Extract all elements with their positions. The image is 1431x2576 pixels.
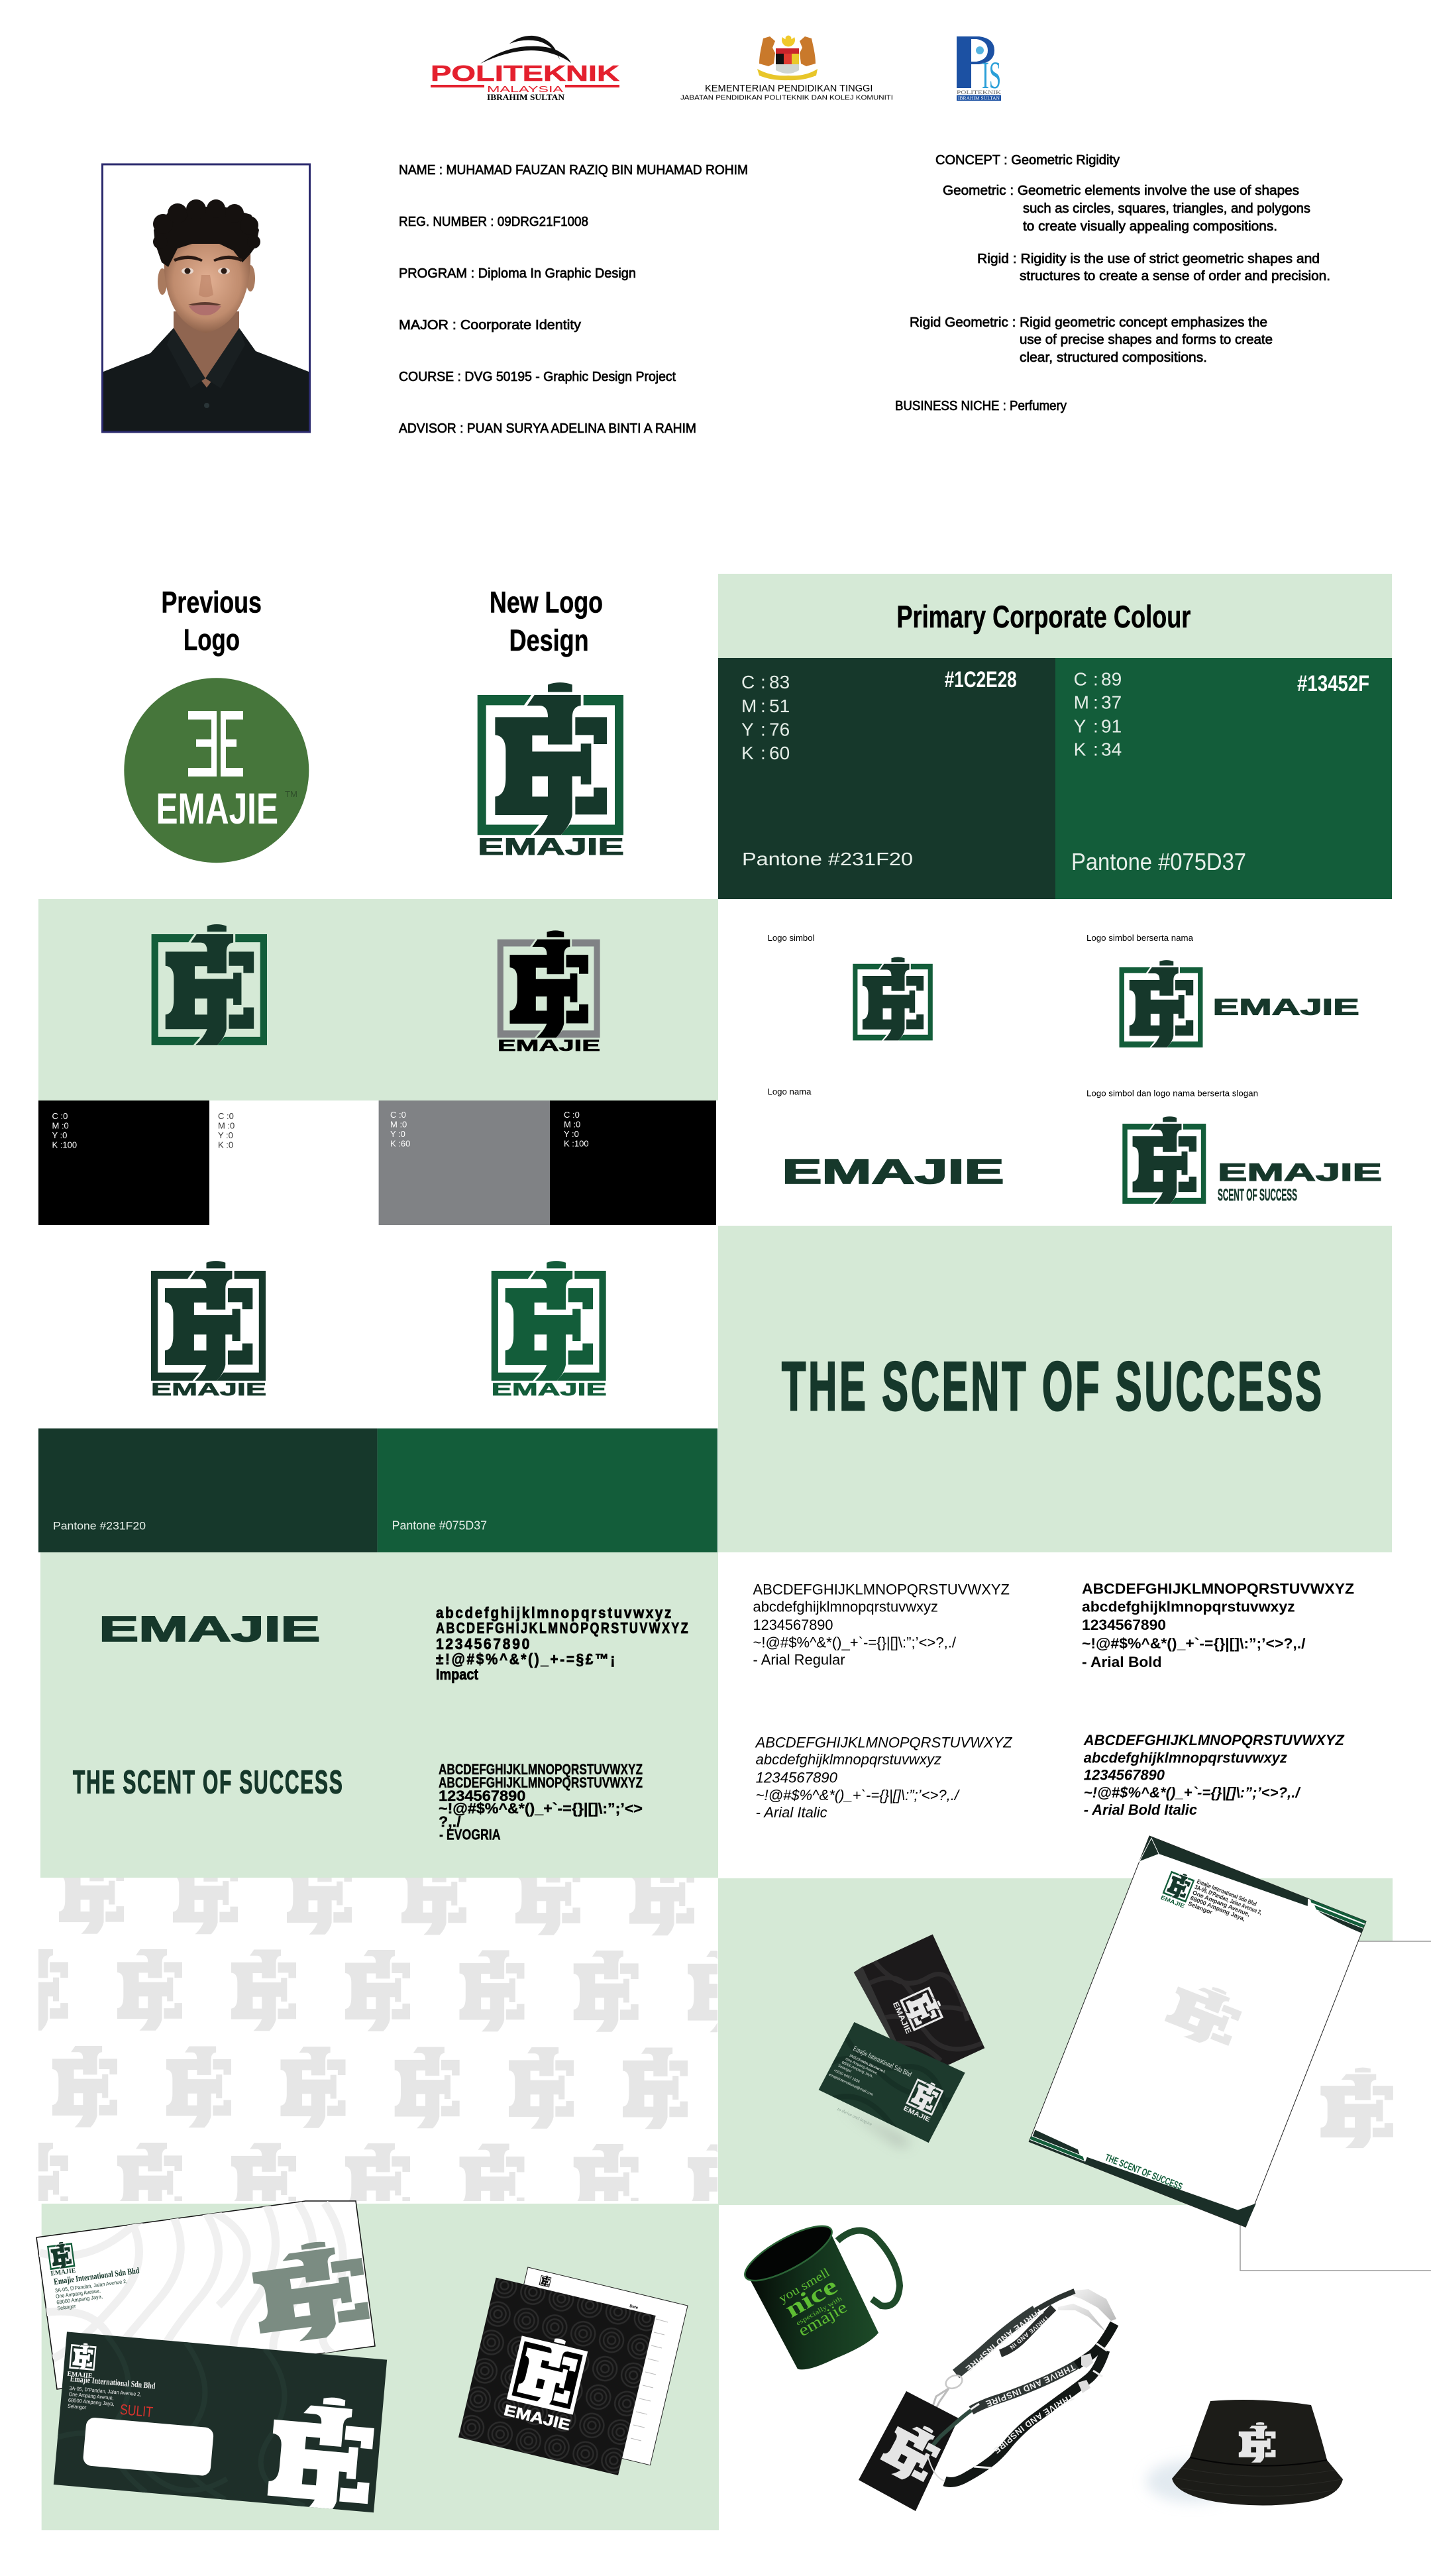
swatch: dark green: 83 [769, 672, 790, 692]
swatch: dark green: : [761, 720, 766, 740]
logo: dark green one-colour: EMAJIE [151, 1379, 266, 1399]
swatch: Pantone 231F20 [38, 1428, 378, 1552]
concept description: such as circles, squares, triangles, and polygons [1023, 201, 1310, 216]
swatch: dark green: : [761, 743, 766, 763]
logo: Politeknik Malaysia Ibrahim Sultan: POLITEKNIK [431, 61, 619, 85]
swatch: corporate green: 37 [1101, 692, 1122, 713]
swatch: corporate green: : [1093, 716, 1098, 736]
swatch row: mono CMYK values: Y :0 [52, 1130, 67, 1140]
logo: dark green one-colour [151, 1261, 266, 1399]
swatch row: mono CMYK values: C :0 [218, 1111, 234, 1121]
new logo design: EMAJIE [478, 834, 624, 860]
notebook logo [502, 2330, 589, 2434]
envelope: dark [53, 2332, 387, 2520]
panel: typefaces for logo and slogan [40, 1552, 718, 1878]
specimen: Evogria [439, 1761, 643, 1843]
mug text: especially with [795, 2295, 843, 2328]
letterhead slogan: THE SCENT OF SUCCESS [1104, 2152, 1184, 2192]
specimen: Impact [436, 1604, 690, 1683]
specimen: Arial Bold Italic: - Arial Bold Italic [1084, 1801, 1197, 1818]
letterhead watermark [1161, 1974, 1247, 2053]
version: logo symbol [767, 933, 933, 1040]
specimen: Arial Regular: 1234567890 [753, 1617, 833, 1633]
swatch: dark green [718, 658, 1055, 899]
specimen: Evogria: - EVOGRIA [439, 1827, 501, 1843]
student details: MAJOR : Coorporate Identity [399, 318, 581, 333]
specimen: Arial Bold: 1234567890 [1082, 1617, 1166, 1633]
specimen: Arial Regular: - Arial Regular [753, 1652, 845, 1668]
swatch: corporate green: 91 [1101, 716, 1122, 736]
panel: slogan [718, 1226, 1392, 1552]
swatch: Pantone 075D37 [378, 1428, 717, 1552]
envelope return address: EMAJIE [50, 2267, 76, 2278]
business card: green: EMAJIE [902, 2105, 931, 2124]
letterhead address [1187, 1878, 1265, 1933]
lanyard [859, 2288, 1118, 2511]
mug text: emajie [795, 2298, 850, 2340]
swatch: corporate green: Pantone #075D37 [1071, 848, 1246, 875]
version: logo name [767, 1087, 1004, 1191]
business card: green: Selangor [837, 2064, 852, 2074]
logo: green one-colour [492, 1261, 607, 1399]
swatch: corporate green: K [1074, 739, 1086, 760]
envelope address: Emajie International Sdn Bhd [70, 2373, 156, 2390]
specimen: Arial Regular: abcdefghijklmnopqrstuvwxyz [753, 1599, 938, 1615]
letterhead address: 3A-05, D'Pandan, Jalan Avenue 2, [1194, 1884, 1263, 1916]
letterhead bottom band [1085, 2139, 1256, 2227]
swatch: dark green: 60 [769, 743, 790, 763]
business card: green: 3A-05, D'Pandan, Jalan Avenue 2, [849, 2054, 886, 2074]
envelope return address [47, 2232, 144, 2312]
specimen: Arial Bold: ~!@#$%^&*()_+`-={}|[]\:”;’<>?,./ [1082, 1635, 1305, 1652]
panel: merchandise tint strip [716, 2205, 719, 2530]
swatch row: mono CMYK values: Y :0 [390, 1129, 405, 1139]
notebook logo: EMAJIE [502, 2401, 572, 2434]
envelope return address: One Ampang Avenue, [56, 2288, 101, 2300]
lanyard badge [859, 2391, 971, 2511]
swatch: corporate green: Y [1074, 716, 1086, 736]
student details: REG. NUMBER : 09DRG21F1008 [399, 215, 588, 229]
logo: full colour on tint [152, 924, 267, 1045]
lanyard strap text: THRIVE AND INSPIRE [994, 2394, 1075, 2454]
logo: coat of arms and ministry name [680, 36, 893, 102]
concept description: structures to create a sense of order and precision. [1020, 269, 1330, 284]
student details [399, 163, 748, 436]
specimen: Impact: abcdefghijklmnopqrstuvwxyz [436, 1604, 673, 1621]
swatch: dark green: : [761, 672, 766, 692]
logo: PIS Politeknik Ibrahim Sultan [957, 36, 1002, 101]
specimen: Impact: Impact [436, 1666, 478, 1683]
previous logo: green circle EMAJIE: EMAJIE [156, 784, 278, 833]
swatch row: mono CMYK values: K :60 [390, 1138, 410, 1149]
mug text [776, 2266, 850, 2340]
logo: greyscale with wordmark: EMAJIE [498, 1037, 600, 1055]
specimen: Arial Bold Italic: ~!@#$%^&*()_+`-={}|[]\:”;’<>?,./ [1084, 1784, 1301, 1801]
specimen: Evogria: ABCDEFGHIJKLMNOPQRSTUVWXYZ [439, 1774, 643, 1791]
student details: NAME : MUHAMAD FAUZAN RAZIQ BIN MUHAMAD ROHIM [399, 163, 748, 178]
swatch: corporate green: 34 [1101, 739, 1122, 760]
panel: primary corporate colour [718, 574, 1392, 899]
swatch: corporate green [1055, 658, 1392, 899]
swatch: dark green: Y [741, 720, 754, 740]
business card: green: Emajie International Sdn Bhd [852, 2045, 913, 2078]
concept description [895, 153, 1330, 413]
specimen: Arial Regular: ~!@#$%^&*()_+`-={}|[]\:”;’<>?,./ [753, 1635, 957, 1651]
swatch: dark green: C [741, 672, 755, 692]
business card: green: to thrive and inspire [837, 2106, 873, 2127]
letterhead address: 68000 Ampang Jaya, [1189, 1895, 1246, 1922]
concept description: Rigid : Rigidity is the use of strict geometric shapes and [977, 252, 1320, 266]
swatch row: mono CMYK values: K :100 [564, 1138, 589, 1149]
version: logo symbol: Logo simbol [767, 933, 815, 943]
swatch: Pantone 231F20: Pantone #231F20 [53, 1520, 146, 1532]
lanyard bend highlights [1069, 2289, 1116, 2321]
logo: PIS Politeknik Ibrahim Sultan: IBRAHIM SULTAN [958, 95, 1000, 101]
letterhead address: One Ampang Avenue, [1192, 1889, 1251, 1917]
version: symbol with name: Logo simbol berserta nama [1086, 933, 1194, 943]
lanyard strap text: THRIVE AND INSPIRE [965, 2309, 1044, 2372]
version: symbol, name and slogan [1086, 1089, 1382, 1205]
swatch: corporate green: : [1093, 669, 1098, 689]
previous logo: green circle EMAJIE: TM [285, 789, 297, 799]
letterhead front sheet [1029, 1836, 1367, 2227]
lanyard strap logos [1078, 2353, 1093, 2393]
swatch: corporate green: : [1093, 692, 1098, 713]
specimen: Evogria: ?,./ [439, 1813, 461, 1830]
business card: green: emajieinternational@mail.com [828, 2073, 874, 2097]
concept description: Rigid Geometric : Rigid geometric concept emphasizes the [910, 315, 1267, 330]
label: SULIT: SULIT [119, 2401, 154, 2420]
notebook [458, 2267, 688, 2475]
swatch row: mono CMYK values [38, 1100, 716, 1225]
specimen: Arial Italic [755, 1735, 1013, 1821]
envelope window [83, 2417, 214, 2477]
logo: coat of arms and ministry name: JABATAN PENDIDIKAN POLITEKNIK DAN KOLEJ KOMUNITI [680, 94, 893, 102]
version: symbol, name and slogan: EMAJIE [1218, 1159, 1382, 1186]
swatch: dark green: M [741, 696, 757, 716]
envelope return address: Selangor [57, 2303, 76, 2312]
specimen: Arial Italic: 1234567890 [756, 1770, 838, 1786]
swatch row: mono CMYK values: M :0 [564, 1120, 580, 1129]
version: symbol, name and slogan: SCENT OF SUCCESS [1218, 1186, 1297, 1205]
swatch row: mono CMYK values: M :0 [52, 1121, 69, 1130]
specimen: Arial Bold: - Arial Bold [1082, 1654, 1162, 1670]
bucket hat [1146, 2400, 1343, 2506]
envelope big logo [268, 2397, 374, 2509]
panel: envelope and notebook backdrop [42, 2204, 718, 2530]
slogan lockup: THE SCENT OF SUCCESS [73, 1765, 344, 1801]
letterhead address: Emajie International Sdn Bhd [1196, 1878, 1257, 1907]
envelope address: 3A-05, D'Pandan, Jalan Avenue 2, [69, 2385, 142, 2398]
wordmark: EMAJIE [99, 1609, 320, 1649]
swatch: corporate green: 89 [1101, 669, 1122, 689]
specimen: Arial Bold [1082, 1581, 1354, 1670]
swatch: corporate green: C [1074, 669, 1087, 689]
swatch row: mono CMYK values: Y :0 [564, 1129, 579, 1139]
specimen: Impact: ±!@#$%^&*()_+-=§£™¡ [436, 1650, 617, 1668]
envelope address: 68000 Ampang Jaya, [68, 2397, 115, 2407]
student details: PROGRAM : Diploma In Graphic Design [399, 266, 636, 281]
envelope address: One Ampang Avenue, [68, 2391, 114, 2401]
envelope: white [36, 2201, 375, 2389]
envelope address [68, 2373, 156, 2416]
concept description: CONCEPT : Geometric Rigidity [935, 153, 1120, 168]
heading: New Logo Design: Design [509, 623, 589, 657]
student details: COURSE : DVG 50195 - Graphic Design Project [399, 370, 676, 384]
logo: Politeknik Malaysia Ibrahim Sultan: MALAYSIA [487, 84, 564, 94]
logo: coat of arms and ministry name: KEMENTERIAN PENDIDIKAN TINGGI [705, 83, 873, 94]
business card: green: 68000 Ampang Jaya, [841, 2061, 874, 2079]
swatch: Pantone 075D37: Pantone #075D37 [392, 1519, 487, 1532]
hat logo [1239, 2422, 1275, 2463]
specimen: Arial Bold Italic: abcdefghijklmnopqrstuvwxyz [1084, 1750, 1287, 1766]
envelope watermark logo [249, 2236, 372, 2346]
new logo design [478, 682, 624, 860]
concept description: use of precise shapes and forms to create [1020, 333, 1273, 347]
student details: ADVISOR : PUAN SURYA ADELINA BINTI A RAHIM [399, 421, 696, 436]
mug text: nice [780, 2272, 842, 2323]
version: logo name: Logo nama [767, 1087, 812, 1097]
specimen: Impact: ABCDEFGHIJKLMNOPQRSTUVWXYZ [436, 1619, 690, 1637]
specimen: Evogria: ~!@#$%^&*()_+`-={}|[]\:”;’<> [439, 1800, 643, 1817]
concept description: BUSINESS NICHE : Perfumery [895, 399, 1067, 413]
lanyard strap text: THRIVE AND INSPIRE [1010, 2316, 1049, 2349]
swatch row: mono CMYK values: K :100 [52, 1140, 77, 1150]
letterhead logo [1160, 1869, 1196, 1909]
heading: Previous Logo: Logo [184, 623, 240, 657]
logo: PIS Politeknik Ibrahim Sultan: IS [982, 54, 1001, 97]
swatch row: mono CMYK values: M :0 [218, 1121, 235, 1130]
swatch row: mono CMYK values: C :0 [564, 1110, 580, 1120]
business card shadow [841, 2107, 911, 2145]
specimen: Arial Regular: ABCDEFGHIJKLMNOPQRSTUVWXYZ [753, 1582, 1010, 1598]
envelope address: Selangor [68, 2403, 87, 2410]
mug [738, 2216, 900, 2369]
panel: logo colour variations [38, 899, 718, 1100]
panel: stationery backdrop [718, 1878, 1393, 2205]
student portrait photo [102, 164, 310, 432]
swatch: dark green: #1C2E28 [945, 667, 1017, 692]
envelope logo [67, 2342, 97, 2380]
swatch: dark green: K [741, 743, 754, 763]
swatch row: mono CMYK values: Y :0 [218, 1130, 233, 1140]
swatch: corporate green: M [1074, 692, 1089, 713]
swatch: dark green: 76 [769, 720, 790, 740]
letterhead back sheet [1240, 1941, 1431, 2271]
swatch row: mono CMYK values: C :0 [390, 1110, 406, 1120]
lanyard clasp [943, 2373, 965, 2391]
specimen: Arial Bold: abcdefghijklmnopqrstuvwxyz [1082, 1599, 1295, 1615]
specimen: Impact: 1234567890 [436, 1635, 531, 1652]
envelope return address: 68000 Ampang Jaya, [56, 2294, 103, 2306]
specimen: Evogria: 1234567890 [439, 1788, 525, 1804]
lanyard stripes [969, 2343, 1107, 2468]
swatch row: mono CMYK values: K :0 [218, 1140, 233, 1150]
version: symbol with name [1086, 933, 1359, 1047]
specimen: Arial Bold Italic: ABCDEFGHIJKLMNOPQRSTUVWXYZ [1083, 1732, 1345, 1748]
swatch: dark green: : [761, 696, 766, 716]
specimen: Arial Italic: abcdefghijklmnopqrstuvwxyz [756, 1751, 941, 1768]
swatch: corporate green: : [1093, 739, 1098, 760]
swatch: dark green: Pantone #231F20 [742, 849, 913, 869]
swatch: dark green: 51 [769, 696, 790, 716]
logo: PIS Politeknik Ibrahim Sultan: POLITEKNIK [957, 89, 1002, 95]
logo: green one-colour: EMAJIE [492, 1379, 607, 1399]
version: symbol, name and slogan: Logo simbol dan logo nama berserta slogan [1086, 1089, 1258, 1099]
heading: primary corporate colour: Primary Corporate Colour [896, 599, 1191, 634]
lanyard strap text [965, 2309, 1076, 2454]
business card: black: EMAJIE [891, 2000, 913, 2035]
swatch row: mono CMYK values: M :0 [390, 1120, 407, 1129]
envelope logo: EMAJIE [67, 2371, 93, 2380]
swatch row: mono CMYK values: C :0 [52, 1111, 68, 1121]
lanyard straps [1000, 2308, 1053, 2353]
heading: New Logo Design: New Logo [490, 586, 603, 619]
heading: Previous Logo [162, 586, 262, 657]
letterhead logo: EMAJIE [1160, 1894, 1186, 1909]
specimen: Arial Bold Italic: 1234567890 [1084, 1767, 1165, 1784]
previous logo: green circle EMAJIE [124, 678, 309, 863]
letterhead top corner band [1140, 1836, 1310, 1925]
specimen: Arial Italic: ~!@#$%^&*()_+`-={}|[]\:”;’<>?,./ [756, 1787, 960, 1803]
lanyard strap text: THRIVE AND INSPIRE [986, 2365, 1076, 2406]
concept description: to create visually appealing compositions. [1023, 219, 1277, 234]
specimen: Arial Bold Italic [1083, 1732, 1345, 1818]
letterhead address: Selangor [1187, 1900, 1214, 1916]
notebook: Date [629, 2304, 639, 2310]
envelope return address: Emajie International Sdn Bhd [53, 2265, 140, 2286]
swatch: corporate green: #13452F [1297, 671, 1369, 696]
version: logo name: EMAJIE [782, 1153, 1004, 1191]
concept description: Geometric : Geometric elements involve the use of shapes [943, 184, 1299, 198]
business card: green [816, 2022, 965, 2144]
concept description: clear, structured compositions. [1020, 350, 1207, 365]
mug text: you smell [776, 2266, 832, 2306]
version: symbol with name: EMAJIE [1213, 995, 1359, 1020]
envelope return address: 3A-05, D'Pandan, Jalan Avenue 2, [54, 2278, 128, 2294]
specimen: Arial Regular [753, 1582, 1010, 1668]
panel: logo versions [767, 933, 1382, 1205]
specimen: Arial Bold: ABCDEFGHIJKLMNOPQRSTUVWXYZ [1082, 1581, 1354, 1597]
specimen: Evogria: ABCDEFGHIJKLMNOPQRSTUVWXYZ [439, 1761, 643, 1778]
heading: Previous Logo: Previous [162, 586, 262, 619]
business card: green: +6019 6467 1036 [833, 2068, 861, 2084]
business card: black [853, 1935, 984, 2065]
specimen: Arial Italic: - Arial Italic [756, 1804, 827, 1821]
business card: green: One Ampang Avenue, [845, 2057, 878, 2076]
heading: New Logo Design [490, 586, 603, 657]
panel: brand pattern [3, 1852, 753, 2226]
logo: Politeknik Malaysia Ibrahim Sultan [431, 36, 619, 102]
logo: greyscale with wordmark [498, 930, 600, 1055]
logo: Politeknik Malaysia Ibrahim Sultan: IBRAHIM SULTAN [487, 93, 564, 102]
specimen: Arial Italic: ABCDEFGHIJKLMNOPQRSTUVWXYZ [755, 1735, 1013, 1751]
